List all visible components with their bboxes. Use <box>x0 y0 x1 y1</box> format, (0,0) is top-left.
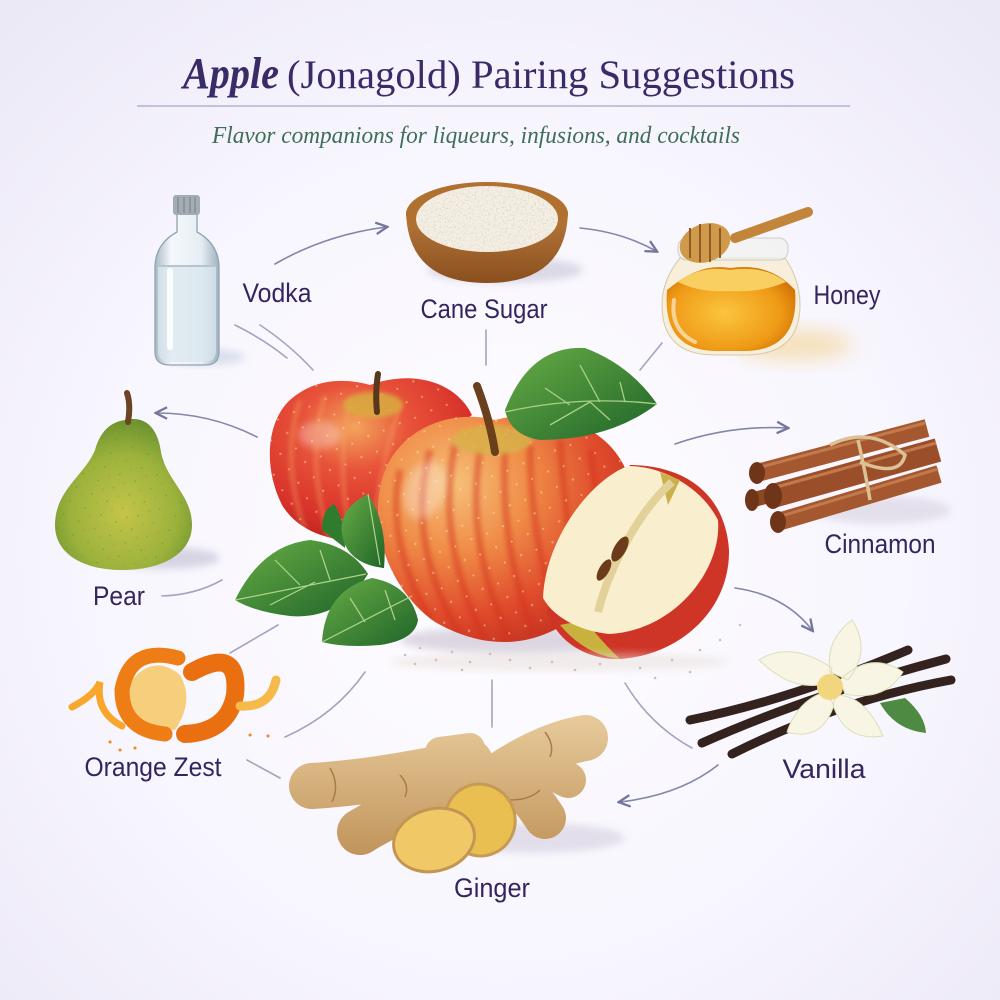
icon: orange zest <box>72 655 276 750</box>
label: honey: Honey <box>814 280 881 310</box>
label: orange zest: Orange Zest <box>84 752 222 782</box>
icon: ginger <box>312 732 625 881</box>
icon: vodka bottle <box>155 195 245 365</box>
title: Apple <box>180 49 279 98</box>
icon: pear <box>55 393 220 570</box>
decorative sprinkle <box>390 653 730 671</box>
connector arrows <box>157 227 812 802</box>
label: cinnamon: Cinnamon <box>824 529 936 559</box>
label: vanilla: Vanilla <box>782 754 867 784</box>
subtitle: Flavor companions for liqueurs, infusions, and cocktails <box>211 123 740 149</box>
icon: cinnamon sticks <box>745 423 950 533</box>
group: left leaves <box>235 494 418 646</box>
label: cane sugar: Cane Sugar <box>420 294 548 324</box>
title: (Jonagold) Pairing Suggestions <box>287 52 795 97</box>
label: pear: Pear <box>93 581 145 611</box>
icon: honey jar <box>662 212 853 360</box>
icon: back apple <box>270 371 472 538</box>
icon: cut apple <box>543 465 729 659</box>
icon: vanilla <box>690 620 951 754</box>
label: ginger: Ginger <box>454 873 530 903</box>
label: vodka: Vodka <box>242 278 312 308</box>
icon: top leaf <box>505 348 657 440</box>
icon: cane sugar bowl <box>406 182 583 283</box>
icon: main apple <box>370 386 640 654</box>
